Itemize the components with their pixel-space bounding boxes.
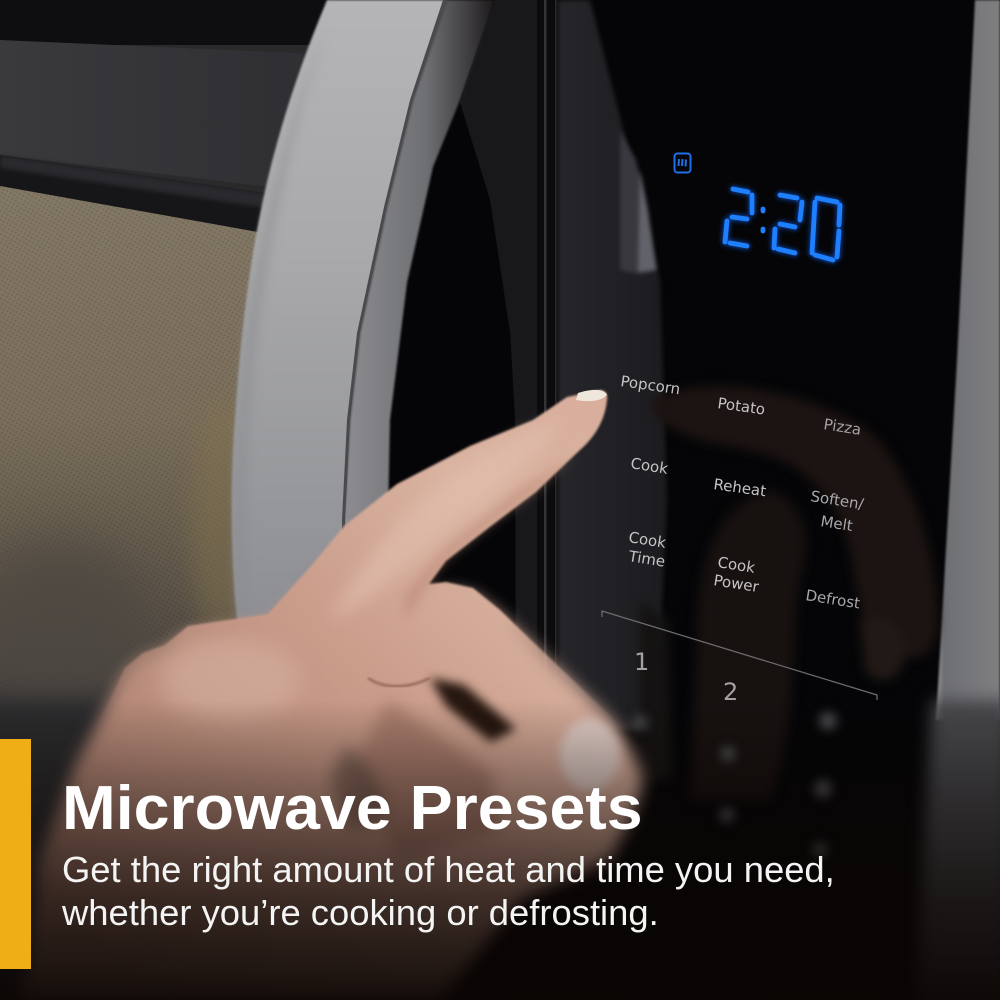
preset button labels: Cook bbox=[716, 553, 757, 577]
preset button labels: Popcorn bbox=[619, 372, 681, 398]
background cavity and mesh window bbox=[0, 0, 340, 1000]
right stainless steel strip bbox=[915, 0, 1000, 1000]
icon: display indicator bbox=[674, 154, 690, 172]
white ring blur bbox=[560, 719, 620, 791]
whole hand outline, in focus at the top and fading out bbox=[105, 388, 610, 719]
body text bbox=[62, 849, 835, 933]
body text: Get the right amount of heat and time you need, bbox=[62, 849, 835, 890]
bottom dark gradient overlay bbox=[0, 700, 1000, 1000]
preset button labels: 1 bbox=[634, 648, 649, 676]
display reflection bbox=[620, 130, 657, 274]
hand reflection on glass bbox=[640, 386, 938, 800]
crease bbox=[368, 678, 430, 686]
curved glass reflection bbox=[558, 0, 667, 730]
accent bar bbox=[0, 739, 31, 969]
preset button labels: Potato bbox=[716, 394, 766, 419]
preset button labels: Defrost bbox=[804, 586, 861, 613]
lower shadow gap bbox=[330, 745, 385, 830]
third finger bbox=[350, 700, 500, 860]
preset button labels: Reheat bbox=[712, 475, 767, 500]
body text: whether you’re cooking or defrosting. bbox=[62, 892, 659, 933]
lower hand, out of focus bbox=[20, 560, 643, 1000]
heading: Microwave Presets bbox=[62, 774, 643, 843]
fingernail bbox=[576, 390, 607, 401]
preset button labels: Time bbox=[626, 547, 666, 571]
gap between fingers bbox=[430, 678, 516, 742]
preset button labels: Soften/ bbox=[809, 487, 866, 513]
digital clock 2:20 bbox=[725, 189, 840, 260]
hand with pointing finger bbox=[20, 390, 643, 1000]
preset button labels: Power bbox=[712, 571, 761, 596]
dark door panel and black wedge bbox=[380, 0, 558, 700]
preset button labels: 2 bbox=[723, 678, 738, 706]
preset button labels: Pizza bbox=[822, 415, 863, 439]
finger highlight bbox=[330, 420, 560, 620]
preset button labels: Melt bbox=[819, 512, 854, 535]
blurred keypad keys bbox=[632, 712, 837, 858]
preset button labels: Cook bbox=[629, 454, 670, 478]
finger underside shadow bbox=[405, 455, 575, 620]
back of hand highlight bbox=[160, 640, 300, 720]
preset button labels bbox=[619, 372, 866, 706]
door handle ring bbox=[232, 0, 495, 640]
preset button labels: Cook bbox=[627, 528, 668, 552]
keypad divider line bbox=[602, 611, 877, 700]
